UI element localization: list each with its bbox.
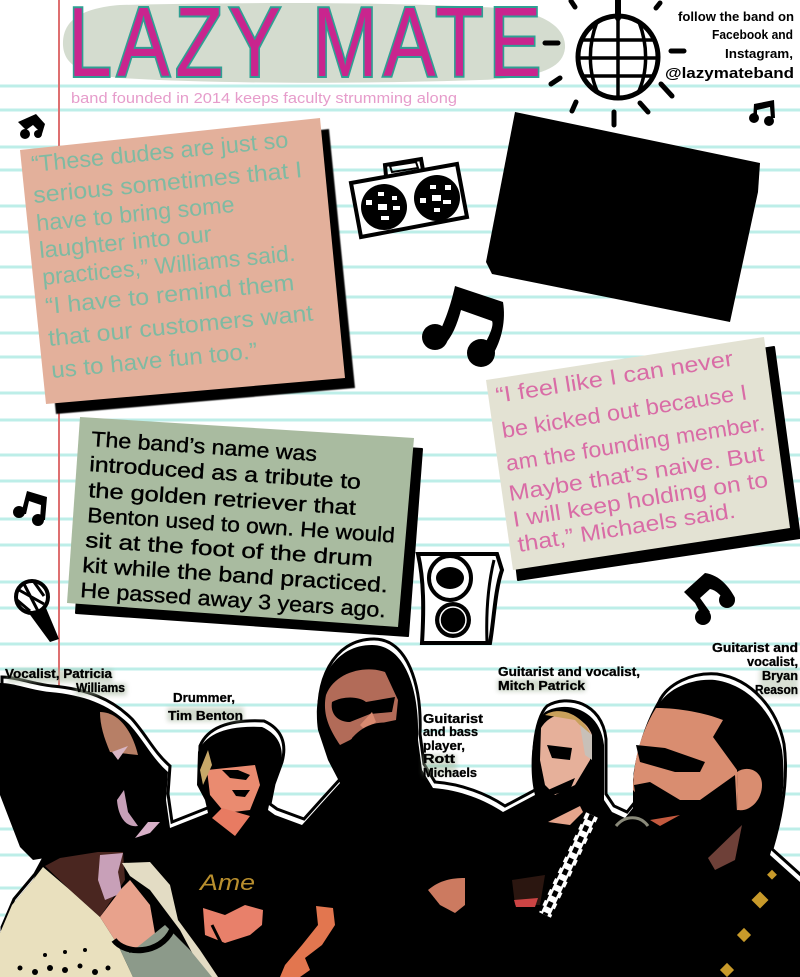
Mitch face <box>540 715 592 795</box>
caption: Rott Michaels <box>423 712 484 780</box>
caption: Rott Michaels: player, <box>423 739 465 753</box>
pink note quote text <box>30 126 315 383</box>
caption: Bryan Reason <box>712 641 798 697</box>
green note text: kit while the band practiced. <box>82 554 389 597</box>
icon: music note left <box>13 491 47 526</box>
icon: disco ball <box>545 0 684 125</box>
caption: Rott Michaels: Michaels <box>423 766 477 780</box>
green note text <box>80 428 396 622</box>
caption: Tim Benton: Drummer, <box>173 691 235 705</box>
caption: Bryan Reason: Guitarist and <box>712 641 798 655</box>
Bryan face <box>633 708 738 815</box>
caption: Mitch Patrick: Guitarist and vocalist, <box>498 665 640 679</box>
pink note quote text: practices,” Williams said. <box>41 240 296 290</box>
cream note quote text: am the founding member. <box>504 410 767 476</box>
Rott face <box>325 669 398 745</box>
Bryan microphone <box>616 818 648 826</box>
Tim hand <box>203 905 263 943</box>
pink note quote text: “These dudes are just so <box>30 126 289 177</box>
Patricia cardigan <box>0 867 133 977</box>
Bryan strap studs <box>720 870 777 977</box>
cream note quote text <box>494 346 770 557</box>
Tim face <box>207 765 260 813</box>
pink note quote text: “I have to remind them <box>44 269 295 319</box>
icon: boombox <box>351 159 467 237</box>
caption: Mitch Patrick <box>498 665 640 693</box>
pink note quote text: serious sometimes that I <box>32 156 303 208</box>
icon: speaker <box>418 554 502 643</box>
title background blob <box>63 3 565 83</box>
caption: Tim Benton <box>168 691 243 723</box>
caption: Rott Michaels: Guitarist <box>423 712 484 726</box>
follow the band text: @lazymateband <box>665 65 794 82</box>
caption: Bryan Reason: Reason <box>755 683 798 697</box>
cream note quote text: “I feel like I can never <box>494 346 735 408</box>
pink note quote text: us to have fun too.” <box>50 337 259 383</box>
panel: pink quote note <box>20 118 355 414</box>
Mitch guitar strap <box>539 813 598 917</box>
caption: Rott Michaels: and bass <box>423 725 478 739</box>
follow the band text: follow the band on <box>678 10 794 24</box>
caption: Patricia Williams: Williams <box>76 681 125 695</box>
pink note quote text: that our customers want <box>47 300 315 351</box>
icon: microphone <box>16 581 59 642</box>
follow the band text: Instagram, <box>725 47 793 61</box>
green note text: sit at the foot of the drum <box>85 529 374 571</box>
Rott hand <box>428 878 465 913</box>
Patricia neck <box>45 852 125 917</box>
icon: music note top right <box>749 100 775 126</box>
green note text: He passed away 3 years ago. <box>80 579 387 622</box>
caption: Bryan Reason: vocalist, <box>747 655 798 669</box>
icon: music note lower right <box>684 573 735 625</box>
Patricia neck highlight <box>98 853 123 900</box>
Tim arm <box>280 906 335 977</box>
pink note quote text: laughter into our <box>38 220 213 263</box>
icon: music note top left <box>18 114 45 139</box>
cream note quote text: that,” Michaels said. <box>516 498 737 557</box>
green note text: The band’s name was <box>91 428 318 466</box>
green note text: introduced as a tribute to <box>89 453 362 494</box>
panel: green name story note <box>67 417 422 636</box>
caption: Tim Benton: Tim Benton <box>168 709 243 723</box>
icon: large music note <box>422 286 504 367</box>
green note text: Benton used to own. He would <box>87 504 396 547</box>
sticker outline behind band <box>2 639 800 971</box>
Bryan neck <box>708 825 742 870</box>
pink note quote text: have to bring some <box>35 191 236 236</box>
band photo cutout <box>0 639 800 977</box>
follow the band text <box>665 10 794 82</box>
cream note quote text: be kicked out because I <box>500 379 749 443</box>
Patricia dress <box>118 925 212 977</box>
caption: Patricia Williams: Vocalist, Patricia <box>5 667 113 681</box>
cream note quote text: Maybe that’s naive. But <box>507 441 766 506</box>
caption: Patricia Williams <box>5 667 126 695</box>
Bryan ear <box>737 769 762 810</box>
Patricia lapel <box>122 862 218 977</box>
panel: black quote box <box>486 112 760 322</box>
green note text: the golden retriever that <box>88 479 357 520</box>
Patricia face <box>100 712 138 755</box>
follow the band text: Facebook and <box>712 28 793 42</box>
Tim neck <box>212 808 250 836</box>
black band silhouette <box>0 645 800 977</box>
caption: Bryan Reason: Bryan <box>762 669 798 683</box>
Patricia chest <box>100 880 157 950</box>
subtitle: band founded in 2014 keeps faculty strumming along <box>71 90 457 107</box>
panel: cream quote note <box>486 337 800 580</box>
Mitch shirt print <box>512 875 545 905</box>
caption: Rott Michaels: Rott <box>423 752 456 766</box>
cream note quote text: I will keep holding on to <box>511 467 770 532</box>
caption: Mitch Patrick: Mitch Patrick <box>498 679 585 693</box>
Tim shirt logo: Ame <box>198 870 255 895</box>
